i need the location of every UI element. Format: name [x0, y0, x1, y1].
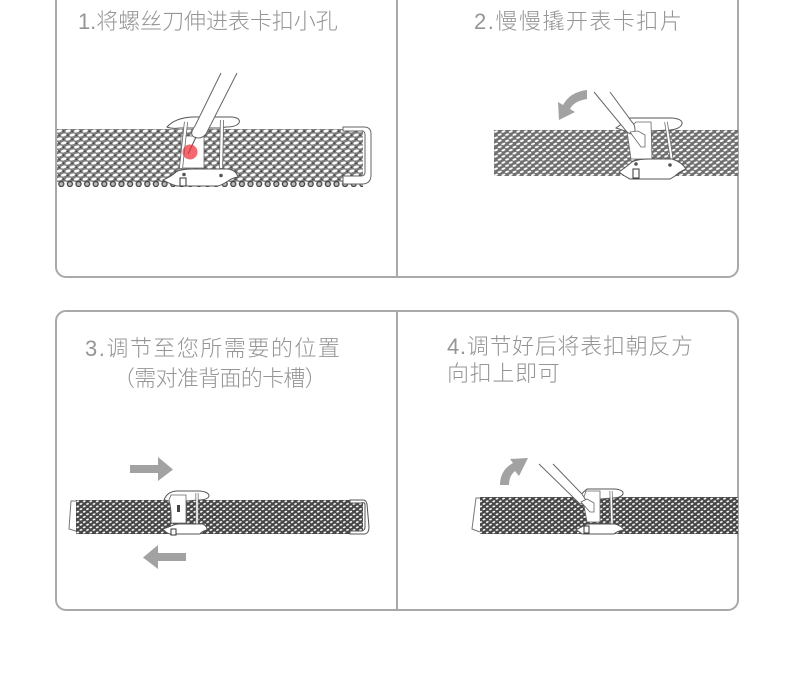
- caption: step 1: 1.将螺丝刀伸进表卡扣小孔: [78, 9, 338, 34]
- clasp base plate: [163, 169, 238, 186]
- clasp base plate: [619, 159, 686, 179]
- icon: curved arrow left: [558, 90, 587, 120]
- clasp opening: [583, 491, 600, 522]
- red marker: [182, 144, 198, 160]
- strap mesh: [57, 129, 363, 187]
- clasp base plate: [163, 524, 207, 534]
- caption: step 4: [447, 334, 694, 386]
- screwdriver: [192, 73, 237, 138]
- icon: right arrow: [130, 457, 173, 481]
- clasp opening: [627, 122, 652, 159]
- panel: bottom row frame: [56, 311, 738, 610]
- illustration: step 2 prying the clasp: [494, 90, 738, 179]
- clasp cover: [578, 489, 623, 500]
- icon: curved arrow right: [500, 458, 528, 485]
- clasp cover: [164, 491, 209, 502]
- clasp opening: [169, 495, 186, 523]
- icon: left arrow: [143, 545, 186, 569]
- clasp cover: [616, 118, 682, 131]
- illustration: step 1 strap with screwdriver: [57, 73, 371, 187]
- panel: top row frame: [56, 0, 738, 277]
- illustration: step 4 closing the clasp: [472, 458, 738, 534]
- strap mesh: [494, 130, 738, 176]
- strap left end: [472, 498, 480, 532]
- strap right end: [350, 500, 369, 534]
- clasp opening: [181, 136, 204, 168]
- caption: step 3 note: （需对准背面的卡槽）: [113, 366, 326, 391]
- caption: step 4: 4.调节好后将表扣朝反方: [447, 334, 694, 359]
- caption: step 2: 2.慢慢撬开表卡扣片: [474, 9, 683, 34]
- illustration: step 3 strap with arrows: [69, 457, 369, 569]
- strap mesh: [76, 500, 363, 534]
- screwdriver: [594, 92, 635, 134]
- strap end loop: [343, 127, 371, 184]
- clasp base plate: [576, 524, 624, 534]
- clasp cover: [167, 117, 239, 128]
- strap mesh: [480, 497, 738, 534]
- screwdriver: [539, 464, 587, 504]
- caption: step 3: 3.调节至您所需要的位置: [85, 336, 341, 361]
- caption: step 4: 向扣上即可: [447, 361, 561, 386]
- strap left end: [69, 501, 76, 531]
